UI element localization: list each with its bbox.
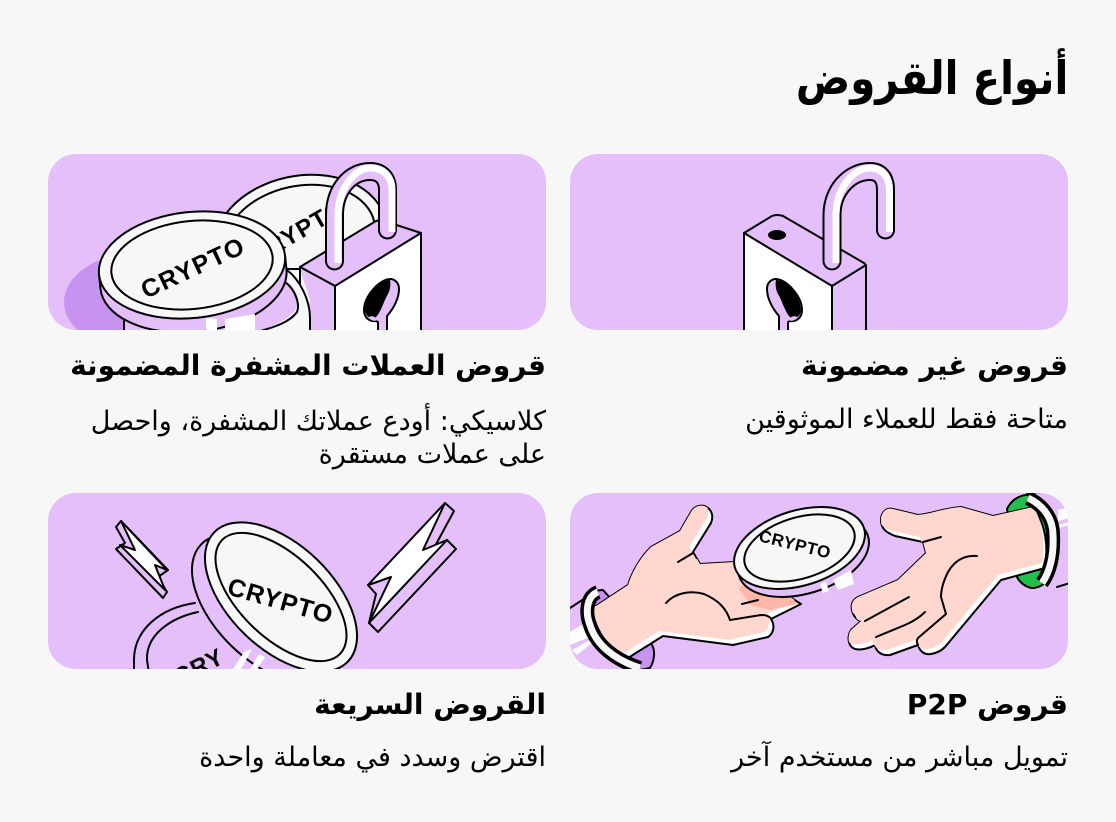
padlock body xyxy=(744,215,866,286)
description: على عملات مستقرة xyxy=(319,439,546,470)
rear coin xyxy=(133,602,220,669)
small lightning bolt xyxy=(116,521,168,598)
panel: secured crypto loans xyxy=(48,154,546,470)
front coin xyxy=(190,521,358,669)
description: متاحة فقط للعملاء الموثوقين xyxy=(745,404,1068,435)
front coin: CRYPTO xyxy=(224,573,337,630)
illustration: coins and lightning bolts xyxy=(48,493,546,669)
heading: قروض العملات المشفرة المضمونة xyxy=(70,349,546,382)
heading: القروض السريعة xyxy=(314,688,546,721)
heading: قروض P2P xyxy=(907,688,1068,721)
coin xyxy=(733,506,870,598)
large lightning bolt xyxy=(368,503,456,632)
illustration: open padlock xyxy=(570,154,1068,330)
illustration: coins and closed padlock xyxy=(48,154,546,330)
left sleeve xyxy=(570,590,654,670)
illustration: coins and closed padlock: CRYPTO xyxy=(137,232,250,304)
shackle xyxy=(832,168,890,263)
description: كلاسيكي: أودع عملاتك المشفرة، واحصل xyxy=(91,406,546,437)
main coin xyxy=(98,254,288,330)
panel: P2P loans xyxy=(570,493,1068,773)
illustration: hands passing a coin xyxy=(570,493,1068,669)
coin: CRYPTO xyxy=(757,526,833,563)
panel: unsecured loans xyxy=(570,154,1068,435)
shackle xyxy=(334,168,392,263)
panel: flash loans xyxy=(48,493,546,773)
left hand xyxy=(587,501,801,668)
description: اقترض وسدد في معاملة واحدة xyxy=(199,742,546,773)
illustration: coins and closed padlock: CRYPTO xyxy=(246,194,350,270)
description xyxy=(91,403,546,470)
keyhole xyxy=(767,279,802,332)
description: تمويل مباشر من مستخدم آخر xyxy=(731,742,1068,773)
keyhole xyxy=(364,279,399,332)
padlock body xyxy=(300,220,421,286)
right hand xyxy=(846,498,1053,655)
heading: قروض غير مضمونة xyxy=(801,349,1068,382)
title: أنواع القروض xyxy=(796,51,1068,105)
lower stacked coin xyxy=(125,281,298,330)
right sleeve xyxy=(1007,492,1070,588)
